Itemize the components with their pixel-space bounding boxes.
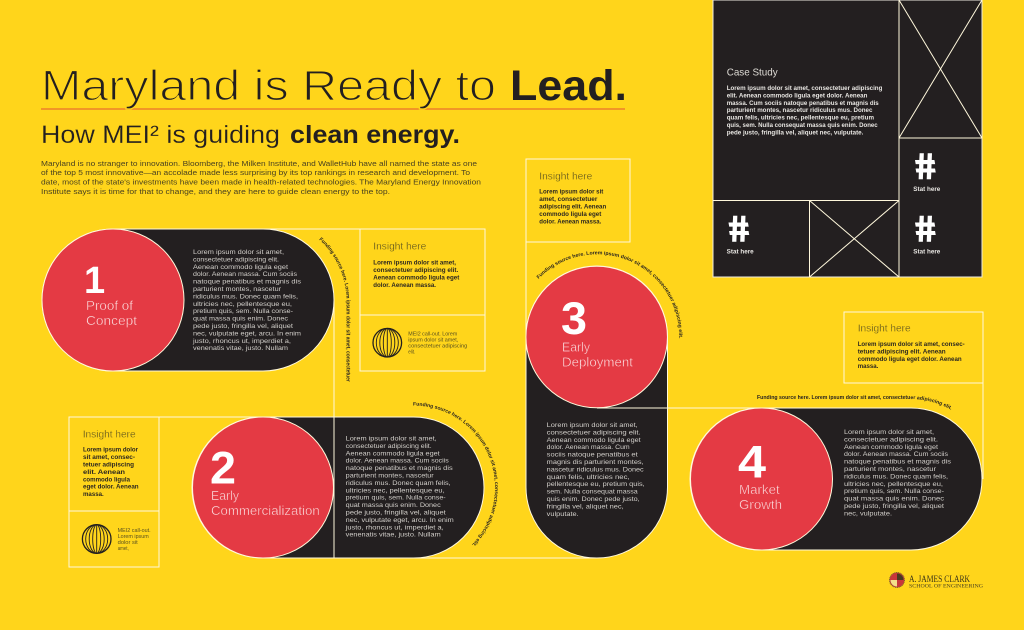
callout 2: Lorem ipsum [118, 534, 149, 540]
step 1 text: venenatis vitae, justo. Nullam [193, 345, 288, 352]
callout 2: MEI2 call-out. [118, 528, 151, 534]
step 4 text: nec, vulputate. [844, 510, 892, 517]
panel: case study: parturient montes, nascetur ridiculus mus. Donec [727, 107, 873, 114]
panel: case study: # [912, 146, 939, 186]
step 3 text: magnis dis parturient montes, [547, 459, 644, 466]
step 1 text: Lorem ipsum dolor sit amet, [193, 249, 284, 256]
step 3 text: fringilla vel, aliquet nec, [547, 503, 624, 510]
icon: globe 2 [82, 525, 111, 553]
insight box 4 [844, 312, 983, 383]
step 2 funding source curved text: Funding source here. Lorem ipsum dolor sit amet, consectetuer adipiscing elit. [413, 402, 498, 546]
step 1 circle: 1 [84, 260, 105, 302]
insight box 2 [69, 417, 159, 567]
callout 2 [118, 528, 151, 552]
insight box 3: amet, consectetuer [539, 196, 598, 203]
step 1 text: parturient montes, nascetur [193, 286, 282, 293]
step 3 text: quis enim. Donec pede justo, [547, 496, 640, 503]
insight box 3: dolor. Aenean massa. [539, 218, 601, 225]
step 1 circle: Proof of [86, 298, 133, 313]
insight box 1: consectetuer adipiscing elit. [373, 267, 459, 274]
step 2 text: dolor. Aenean massa. Cum sociis [346, 458, 449, 465]
callout 2: amet, [118, 546, 129, 552]
step 3 text: pellentesque eu, pretium quis, [547, 481, 645, 488]
step 3 text: dolor. Aenean massa. Cum [547, 444, 630, 451]
step 4 text: Lorem ipsum dolor sit amet, [844, 429, 934, 436]
step 3 funding source curved text: Funding source here. Lorem ipsum dolor sit amet, consectetuer adipiscing elit. [536, 251, 683, 338]
step 2 text: justo, rhoncus ut, imperdiet a, [345, 524, 444, 531]
step 2 circle: Commercialization [211, 503, 320, 518]
step 4 text: Aenean commodo ligula eget [844, 444, 938, 451]
panel: case study: # [912, 208, 939, 249]
panel: step 4 pill [690, 408, 982, 550]
intro paragraph: date, most of the state's investments have been made in health-related technologies. The Maryland Energy Innovation [41, 178, 481, 186]
insight box 4: commodo ligula eget dolor. Aenean [858, 356, 962, 363]
step 1 text [192, 249, 302, 352]
step 3 text: quam felis, ultricies nec, [547, 474, 630, 481]
panel: case study: quis, sem. Nulla consequat massa quis enim. Donec [727, 122, 878, 129]
panel: case study: Stat here [913, 187, 941, 193]
step 1 text: quat massa quis enim. Donec [193, 316, 289, 323]
step 1 funding source curved text: Funding source here. Lorem ipsum dolor sit amet, consectetuer [319, 237, 350, 382]
step 4 circle [690, 408, 832, 550]
insight box 1: Aenean commodo ligula eget [373, 274, 460, 281]
insight box 4: Lorem ipsum dolor sit amet, consec- [858, 341, 965, 348]
panel: step 2 pill [192, 417, 484, 558]
logo: A. James Clark School of Engineering: A. JAMES CLARK [909, 574, 970, 584]
insight box 3 [526, 159, 630, 242]
step 2 text: nec, vulputate eget, arcu. In enim [346, 517, 454, 524]
step 3 circle [526, 266, 667, 408]
step 4 text: parturient montes, nascetur [844, 466, 937, 473]
step 2 text: natoque penatibus et magnis dis [346, 465, 454, 472]
step 2 text: Lorem ipsum dolor sit amet, [346, 436, 437, 442]
logo: A. James Clark School of Engineering: SCHOOL OF ENGINEERING [909, 584, 983, 590]
panel: step 1 pill [42, 229, 334, 371]
step 3 circle: 3 [561, 293, 587, 344]
step 2 text [345, 436, 454, 539]
panel: case study: Stat here [727, 250, 754, 256]
panel: case study: Stat here [913, 250, 941, 256]
panel: case study [713, 0, 982, 277]
logo: A. James Clark School of Engineering [890, 572, 983, 590]
callout 1 [408, 331, 467, 355]
intro paragraph: Institute says it is time for that to change, and they are here to guide clean energy to the top. [41, 187, 390, 196]
panel: case study: # [725, 208, 752, 249]
subtitle: clean energy. [290, 121, 460, 149]
step 4 text: natoque penatibus et magnis dis [844, 459, 952, 466]
step 4 text [844, 429, 952, 517]
subtitle: How MEI² is guiding [41, 121, 280, 149]
step 3 text: nascetur ridiculus mus. Donec [547, 466, 645, 473]
step 1 text: dolor. Aenean massa. Cum sociis [193, 271, 298, 278]
callout 2: dolor sit [118, 540, 138, 546]
step 4 circle: 4 [738, 436, 766, 488]
insight box 2: Insight here [83, 428, 136, 440]
insight box 3: adipiscing elit. Aenean [539, 204, 606, 210]
step 2 text: pretium quis, sem. Nulla conse- [346, 495, 446, 502]
callout 1: ipsum dolor sit amet, [408, 337, 459, 343]
step 2 circle [192, 417, 334, 558]
step 2 circle: Early [211, 488, 239, 503]
step 3 circle: Early [562, 340, 590, 355]
insight box 1: Lorem ipsum dolor sit amet, [373, 259, 456, 266]
step 3 text: Aenean commodo ligula eget [547, 437, 641, 444]
insight box 3: commodo ligula eget [539, 211, 602, 218]
step 3 text: sociis natoque penatibus et [547, 452, 638, 459]
step 4 text: quat massa quis enim. Donec [844, 496, 945, 503]
insight box 2: eget dolor. Aenean [83, 484, 139, 491]
panel: case study: quam felis, ultricies nec, pellentesque eu, pretium [727, 115, 874, 122]
step 2 text: quat massa quis enim. Donec [346, 502, 442, 509]
step 1 text: pretium quis, sem. Nulla conse- [193, 308, 293, 315]
title: Maryland is Ready to [41, 62, 496, 110]
step 2 text: ridiculus mus. Donec quam felis, [346, 480, 451, 487]
step 2 circle: 2 [210, 442, 236, 494]
title underline [41, 108, 625, 110]
insight box 1: Insight here [373, 240, 426, 252]
step 1 text: justo, rhoncus ut, imperdiet a, [192, 338, 291, 345]
panel: step 3 pill [526, 266, 668, 558]
panel: case study: massa. Cum sociis natoque penatibus et magnis dis [727, 100, 879, 107]
step 4 text: ultricies nec, pellentesque eu, [844, 481, 943, 488]
insight box 1 [360, 229, 485, 371]
insight box 3: Lorem ipsum dolor sit [539, 189, 604, 196]
step 1 text: Aenean commodo ligula eget [193, 264, 288, 271]
step 4 text: pede justo, fringilla vel, aliquet [844, 503, 944, 510]
step 4 text: dolor. Aenean massa. Cum sociis [844, 451, 949, 458]
insight box 4: massa. [858, 363, 879, 370]
step 4 text: pretium quis, sem. Nulla conse- [844, 488, 944, 495]
callout 1: MEI2 call-out. Lorem [408, 331, 458, 337]
step 1 text: ridiculus mus. Donec quam felis, [193, 293, 298, 300]
step 2 text: ultricies nec, pellentesque eu, [346, 487, 445, 494]
insight box 2: Lorem ipsum dolor [83, 447, 138, 454]
insight box 3: Insight here [539, 170, 592, 182]
step 1 text: pede justo, fringilla vel, aliquet [193, 323, 293, 330]
icon: globe 1 [373, 328, 402, 357]
step 3 text: Lorem ipsum dolor sit amet, [547, 422, 638, 429]
intro paragraph: Maryland is no stranger to innovation. Bloomberg, the Milken Institute, and WalletHub have all named the state as one [41, 159, 477, 168]
insight box 2: tetuer adipiscing [83, 462, 134, 468]
panel: case study: pede justo, fringilla vel, aliquet nec, vulputate. [727, 129, 864, 136]
intro paragraph: of the top 5 most innovative—an accolade made less surprising by its top rankings in research and development. To [41, 168, 470, 177]
step 2 text: Aenean commodo ligula eget [346, 450, 440, 457]
step 1 text: ultricies nec, pellentesque eu, [193, 301, 292, 308]
step 2 text: parturient montes, nascetur [346, 472, 435, 480]
callout 1: consectetuer adipiscing [408, 343, 467, 349]
step 3 text: sem. Nulla consequat massa [547, 489, 638, 496]
step 2 text: consectetuer adipiscing elit. [346, 443, 432, 450]
intro paragraph [41, 159, 481, 196]
callout 1: elit. [408, 349, 415, 355]
insight box 4: Insight here [858, 323, 911, 335]
panel: case study: elit. Aenean commodo ligula eget dolor. Aenean [727, 92, 867, 99]
step 3 text [547, 422, 645, 518]
insight box 2: commodo ligula [83, 476, 130, 483]
insight box 2: massa. [83, 491, 104, 498]
step 4 circle: Market [739, 482, 780, 497]
step 1 text: consectetuer adipiscing elit. [193, 256, 279, 263]
step 4 circle: Growth [739, 497, 782, 512]
subtitle [41, 121, 460, 149]
panel: case study: Lorem ipsum dolor sit amet, consectetuer adipiscing [727, 85, 882, 92]
step 3 text: vulputate. [547, 511, 579, 518]
step 2 text: pede justo, fringilla vel, aliquet [346, 510, 446, 516]
step 1 circle: Concept [86, 313, 137, 328]
step 4 text: consectetuer adipiscing elit. [844, 436, 938, 443]
step 3 circle: Deployment [562, 355, 633, 370]
step 4 text: ridiculus mus. Donec quam felis, [844, 473, 948, 480]
panel: case study: Case Study [727, 66, 778, 78]
step 3 text: consectetuer adipiscing elit. [547, 429, 641, 436]
title: Lead. [510, 62, 627, 110]
insight box 1: dolor. Aenean massa. [373, 282, 436, 289]
step 1 circle [42, 229, 184, 371]
step 1 text: nec, vulputate eget, arcu. In enim [193, 330, 301, 337]
insight box 2: sit amet, consec- [83, 454, 135, 461]
insight box 2: elit. Aenean [83, 469, 125, 476]
title [41, 62, 627, 110]
step 2 text: venenatis vitae, justo. Nullam [346, 532, 441, 539]
step 1 text: natoque penatibus et magnis dis [193, 279, 302, 286]
step 4 funding source curved text: Funding source here. Lorem ipsum dolor sit amet, consectetuer adipiscing elit. [757, 395, 952, 410]
insight box 4: tetuer adipiscing elit. Aenean [858, 348, 946, 355]
